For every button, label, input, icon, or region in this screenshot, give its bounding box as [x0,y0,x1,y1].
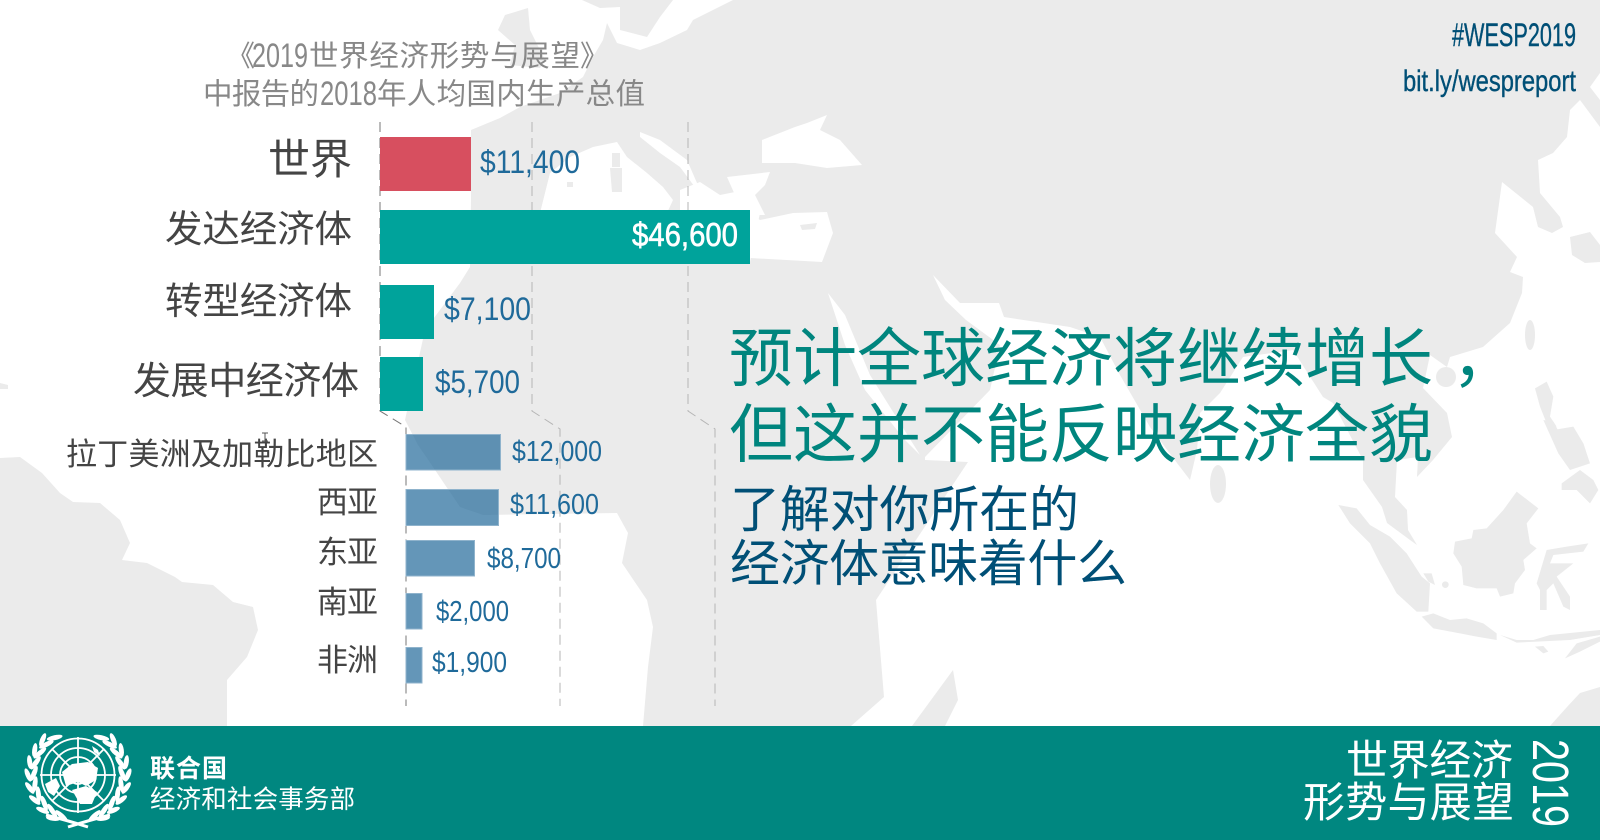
southeast Asia islands [1338,420,1600,658]
headline [729,323,1516,471]
bar: world [268,136,580,191]
seas on the map [540,115,925,460]
bar: transition economies: $7,100 [444,291,531,327]
bar: developing economies [133,357,520,411]
subheading [730,482,1127,592]
chart title: 》 [580,41,609,73]
subheading: 经济体意味着什么 [730,536,1127,592]
Philippines islands north [1535,382,1588,460]
bar chart: GDP per capita main groups [133,136,750,411]
icon: UN emblem [23,732,133,827]
headline: 预计全球经济将继续增长 [729,323,1433,395]
hashtag and link [1403,17,1577,98]
bar: world: 世界 [268,136,352,183]
bar: Latin America and the Caribbean: 拉丁美洲及加勒比地区 [66,437,378,472]
bar: South Asia [317,585,509,629]
chart title: 《 [226,41,255,73]
report title: 形势与展望 [1303,779,1514,826]
bar: transition economies: 转型经济体 [165,280,352,322]
chart title: 2018 [320,75,377,113]
bar: Africa [317,643,507,683]
chart title: 年人均国内生产总值 [377,78,645,111]
chart title: 世界经济形势与展望 [309,40,580,73]
chart title: 2019 [252,37,308,75]
bar: Western Asia: 西亚 [317,485,378,520]
bar: developing economies: $5,700 [435,364,520,400]
report title: 世界经济 [1346,737,1513,784]
headline: ， [1452,323,1516,395]
dashed guide lines [380,122,715,706]
organisation name [150,755,355,814]
bar: Latin America and the Caribbean: $12,000 [512,436,602,468]
bar: South Asia: $2,000 [436,596,509,628]
subheading: 了解对你所在的 [730,482,1079,538]
organisation name: 经济和社会事务部 [150,786,355,814]
bar: developed economies [165,208,750,264]
bar: developed economies: $46,600 [632,216,738,253]
bar: Western Asia: $11,600 [510,489,599,521]
report title [1303,737,1514,826]
bar: world: $11,400 [480,144,580,180]
bar: developing economies: 发展中经济体 [133,361,359,403]
chart title [203,37,645,113]
bar: South Asia: 南亚 [317,585,378,620]
organisation name: 联合国 [150,755,227,783]
bar: Western Asia [317,485,599,526]
bar: Latin America and the Caribbean [66,433,602,472]
bar: developed economies: 发达经济体 [165,208,352,250]
chart title: 中报告的 [203,78,319,111]
islands on the map [567,153,817,230]
bar: Africa: $1,900 [432,647,507,679]
bar: East Asia [317,535,561,576]
bar: East Asia: $8,700 [487,543,561,575]
bar: transition economies [165,280,531,339]
bar: East Asia: 东亚 [317,535,378,570]
footer band [0,726,1600,840]
headline: 但这并不能反映经济全貌 [729,399,1433,471]
bar chart: developing regions [66,433,602,683]
bar: Africa: 非洲 [317,643,378,678]
